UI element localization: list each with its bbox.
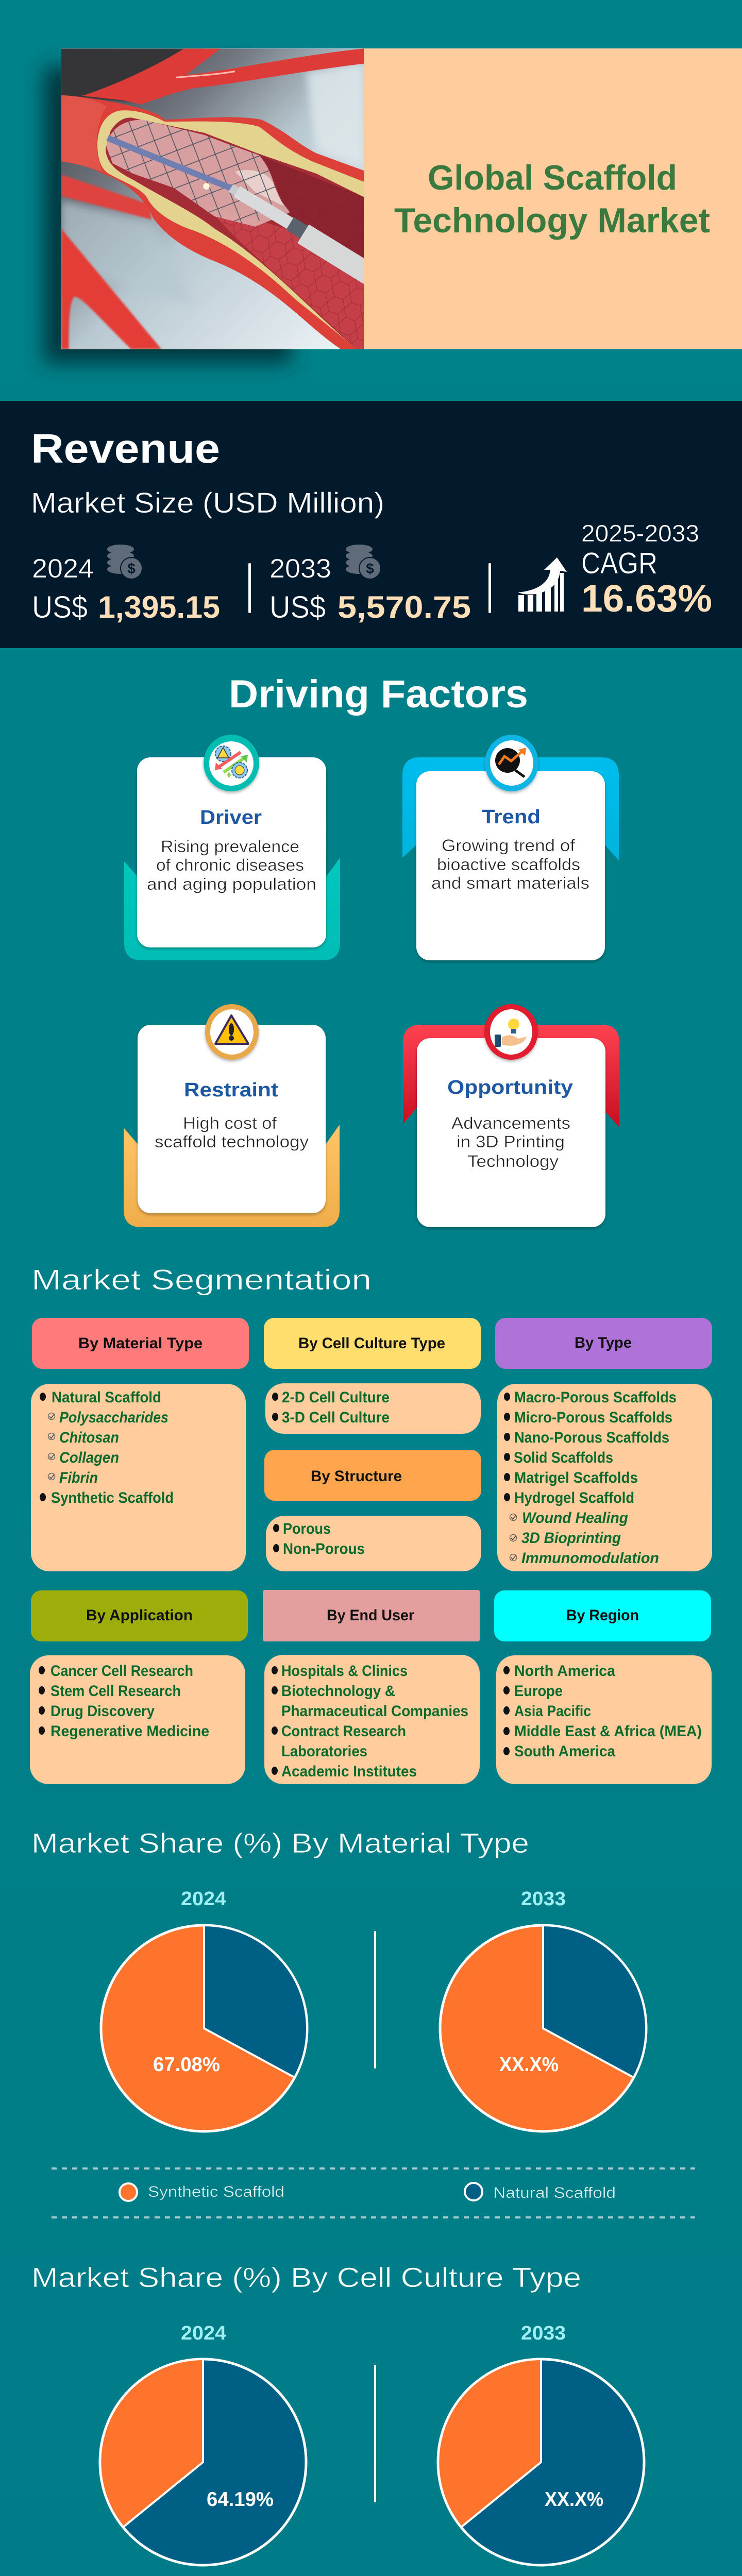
list: region: [496, 1655, 712, 1784]
list: material type: Polysaccharides: [59, 1409, 168, 1426]
icon: trend: [485, 735, 538, 791]
list: type: Hydrogel Scaffold: [514, 1489, 634, 1506]
text: trend description: bioactive scaffolds: [437, 855, 580, 874]
header: by material type: [32, 1318, 249, 1369]
heading: market share by cell culture type: Market Share (%) By Cell Culture Type: [31, 2262, 581, 2293]
title: restraint: Restraint: [184, 1079, 278, 1101]
icon: warning: [205, 1004, 259, 1060]
pie chart: material type 2033: XX.X%: [499, 2054, 559, 2076]
pie chart: cell culture 2033: XX.X%: [545, 2488, 603, 2511]
legend: material type: Synthetic Scaffold: [148, 2183, 284, 2200]
text: opportunity description: Technology: [467, 1152, 559, 1171]
hero title text: Technology Market: [394, 201, 710, 240]
list: structure: [266, 1516, 481, 1571]
stat: 2024 revenue: [32, 554, 220, 624]
list: type: Matrigel Scaffolds: [514, 1469, 638, 1486]
header: by type: [495, 1318, 712, 1369]
icon: coins 2024: $: [127, 561, 136, 577]
list: end user: Hospitals & Clinics: [281, 1663, 408, 1680]
subheading: market size: Market Size (USD Million): [31, 486, 384, 519]
panel: revenue band: [0, 401, 742, 648]
label: 2024: 2024: [181, 1888, 226, 1910]
stat: CAGR: 2025-2033: [581, 520, 699, 547]
list: material type: Synthetic Scaffold: [51, 1489, 174, 1506]
list: region: South America: [514, 1743, 615, 1760]
list: region: North America: [514, 1663, 615, 1680]
title: opportunity: Opportunity: [447, 1077, 573, 1098]
text: opportunity description: [451, 1114, 570, 1171]
list: type: Nano-Porous Scaffolds: [514, 1429, 669, 1446]
stat: CAGR: [581, 520, 712, 620]
pie chart: cell culture 2024: [100, 2359, 306, 2565]
list: cell culture type: [265, 1383, 481, 1434]
list: cell culture type: 2-D Cell Culture: [282, 1389, 390, 1406]
header: by structure: By Structure: [311, 1468, 402, 1485]
text: driver description: and aging population: [147, 875, 316, 893]
text: trend description: Growing trend of: [442, 836, 575, 855]
list: material type: Fibrin: [59, 1469, 98, 1486]
stat: 2033 revenue: [269, 554, 471, 624]
list: region: Middle East & Africa (MEA): [514, 1723, 702, 1740]
text: driver description: of chronic diseases: [156, 856, 304, 874]
stat: 2033 revenue: US$: [269, 590, 326, 624]
card: restraint: [124, 1004, 340, 1227]
pie chart: material type 2024: [101, 1925, 307, 2131]
icon: coins 2033: $: [366, 561, 374, 577]
divider: [488, 563, 491, 613]
list: material type: Collagen: [59, 1449, 119, 1466]
icon: opportunity: [484, 1004, 538, 1060]
list: application: Stem Cell Research: [50, 1683, 181, 1700]
heading: market segmentation: Market Segmentation: [31, 1263, 372, 1296]
list: end user: Biotechnology &: [281, 1683, 395, 1700]
list: application: Drug Discovery: [50, 1703, 155, 1720]
header: by application: By Application: [86, 1607, 193, 1624]
hero title panel: [364, 48, 742, 349]
card: opportunity: [403, 1004, 619, 1227]
text: driver description: [147, 837, 316, 893]
icon: coins 2033: [346, 545, 381, 579]
stat: 2033 revenue: 2033: [269, 554, 331, 584]
list: type: Micro-Porous Scaffolds: [514, 1409, 672, 1426]
list: end user: Pharmaceutical Companies: [281, 1703, 468, 1720]
text: restraint description: [155, 1114, 309, 1151]
header: by type: By Type: [575, 1334, 632, 1351]
text: opportunity description: in 3D Printing: [457, 1132, 565, 1151]
list: application: Cancer Cell Research: [50, 1663, 193, 1680]
header: by end user: By End User: [327, 1607, 414, 1624]
text: restraint description: High cost of: [183, 1114, 277, 1132]
stat: CAGR: 16.63%: [581, 577, 712, 620]
pie chart: cell culture 2024: 64.19%: [207, 2488, 274, 2511]
list: material type: [31, 1384, 246, 1571]
card: trend: [402, 735, 619, 960]
list: region: Europe: [514, 1683, 563, 1700]
list: type: 3D Bioprinting: [521, 1530, 621, 1547]
divider: [374, 2365, 376, 2502]
header: by region: [494, 1590, 711, 1641]
list: type: Macro-Porous Scaffolds: [514, 1389, 677, 1406]
pie chart: material type 2024: 67.08%: [153, 2054, 220, 2076]
list: application: Regenerative Medicine: [50, 1723, 209, 1740]
legend: material type: Natural Scaffold: [493, 2184, 616, 2201]
list: end user: Laboratories: [281, 1743, 367, 1760]
stat: 2024 revenue: US$: [32, 590, 88, 624]
icon: driver: [204, 735, 259, 791]
list: end user: Academic Institutes: [281, 1763, 417, 1780]
list: material type: Natural Scaffold: [52, 1389, 161, 1406]
header: by region: By Region: [566, 1607, 639, 1624]
stat: 2024 revenue: 2024: [32, 554, 94, 584]
list: type: Solid Scaffolds: [514, 1449, 613, 1466]
list: structure: Non-Porous: [283, 1540, 365, 1557]
card: driver: [124, 735, 340, 960]
heading: revenue: Revenue: [31, 426, 220, 471]
header: by end user: [263, 1590, 480, 1641]
hero image: stent in artery: [44, 48, 378, 363]
hero title text: Global Scaffold: [428, 158, 677, 197]
text: driver description: Rising prevalence: [161, 837, 299, 856]
hero title text: [394, 158, 710, 240]
stat: 2033 revenue: 5,570.75: [338, 590, 471, 624]
icon: coins 2024: [107, 545, 142, 579]
list: end user: [264, 1655, 480, 1784]
heading: driving factors: Driving Factors: [229, 672, 528, 716]
list: application: [30, 1655, 245, 1784]
legend: material type: [52, 2168, 695, 2217]
header: by cell culture type: By Cell Culture Type: [298, 1335, 445, 1352]
pie chart: material type 2033: [440, 1925, 646, 2131]
text: trend description: [431, 836, 589, 892]
stat: CAGR: CAGR: [581, 547, 657, 580]
label: 2033: 2033: [521, 2323, 566, 2344]
list: type: Wound Healing: [522, 1510, 628, 1527]
icon: growth arrow: [518, 557, 567, 612]
stat: 2024 revenue: 1,395.15: [98, 590, 220, 624]
list: material type: Chitosan: [59, 1429, 119, 1446]
text: restraint description: scaffold technology: [155, 1132, 309, 1151]
divider: [248, 563, 251, 613]
list: end user: Contract Research: [281, 1723, 406, 1740]
label: 2033: 2033: [521, 1888, 566, 1910]
header: by cell culture type: [264, 1318, 481, 1369]
pie chart: cell culture 2033: [438, 2359, 644, 2565]
list: cell culture type: 3-D Cell Culture: [282, 1409, 390, 1426]
text: opportunity description: Advancements: [451, 1114, 570, 1132]
list: region: Asia Pacific: [514, 1703, 591, 1720]
divider: [374, 1931, 376, 2069]
list: structure: Porous: [283, 1520, 331, 1537]
title: trend: Trend: [482, 806, 541, 828]
label: 2024: 2024: [181, 2323, 226, 2344]
header: by application: [31, 1590, 248, 1641]
list: type: Immunomodulation: [521, 1550, 659, 1567]
title: driver: Driver: [200, 807, 262, 828]
heading: market share by material type: Market Share (%) By Material Type: [31, 1828, 529, 1859]
list: type: [497, 1384, 712, 1571]
header: by structure: [264, 1450, 481, 1501]
header: by material type: By Material Type: [78, 1335, 203, 1352]
text: trend description: and smart materials: [431, 874, 589, 892]
